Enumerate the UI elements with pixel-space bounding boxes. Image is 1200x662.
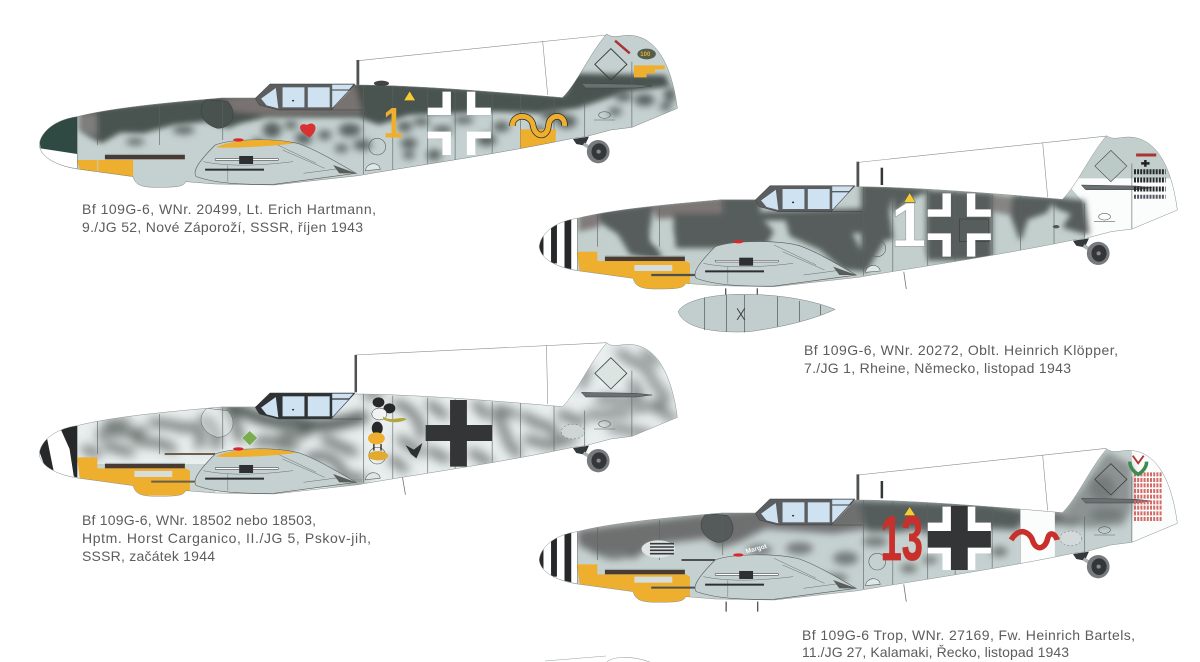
aircraft profile 3: Carganico Bf 109G-6 with Mickey Mouse <box>38 343 677 496</box>
white fuselage band <box>1020 508 1055 566</box>
spinner stripes <box>38 424 77 478</box>
chevron yellow bar <box>520 129 556 151</box>
balkenkreuz white outline <box>428 92 491 155</box>
caption 3: SSSR, začátek 1944 <box>82 548 215 564</box>
tactical number 13: 13 <box>881 504 923 575</box>
fuselage with camouflage <box>544 449 1138 602</box>
drop tank <box>678 288 835 332</box>
outline <box>39 343 677 496</box>
fin diamond <box>1095 464 1127 495</box>
outline <box>39 34 677 187</box>
caption 1: 9./JG 52, Nové Záporoží, SSSR, říjen 1943 <box>82 219 363 235</box>
antenna wire and mast <box>858 136 1107 289</box>
oil cooler vent <box>642 540 675 558</box>
outline <box>539 136 1177 289</box>
caption 4: Bf 109G-6 Trop, WNr. 27169, Fw. Heinrich Bartels, <box>802 627 1135 643</box>
yellow triangle <box>904 507 916 516</box>
spinner stripes <box>539 532 577 583</box>
tactical number 1: 1 <box>891 191 926 261</box>
fuselage with camouflage <box>39 34 677 187</box>
wing yellow panel <box>216 449 296 457</box>
aircraft profile 2: Klöpper Bf 109G-6 with drop tank <box>539 136 1187 332</box>
dome <box>374 81 389 86</box>
yellow lower cowling <box>77 160 133 177</box>
fuselage with camouflage <box>539 136 1187 290</box>
fin diamond filled <box>1095 150 1127 182</box>
caption 2: Bf 109G-6, WNr. 20272, Oblt. Heinrich Klöpper, <box>804 342 1118 358</box>
fin diamond <box>595 358 627 389</box>
balkenkreuz black with white outline <box>928 506 991 570</box>
yellow triangle <box>904 193 916 202</box>
cowling bulge <box>201 99 233 128</box>
cowling bulge white <box>201 408 233 437</box>
fin diamond <box>595 49 627 80</box>
antenna wire and mast <box>355 343 607 495</box>
heart emblem <box>300 123 315 137</box>
cropped next aircraft fragment at bottom edge <box>545 656 650 662</box>
wing yellow panel <box>216 140 294 148</box>
emblem green clover <box>242 431 258 446</box>
outline <box>539 449 1177 602</box>
tactical number 1: 1 <box>384 100 403 147</box>
caption 1: Bf 109G-6, WNr. 20499, Lt. Erich Hartmann, <box>82 201 376 217</box>
aircraft profile 1: Hartmann Bf 109G-6 <box>36 34 677 187</box>
fin markings <box>615 41 665 75</box>
kill markings <box>1134 155 1166 197</box>
Mickey Mouse nose art <box>368 397 407 460</box>
caption 4: 11./JG 27, Kalamaki, Řecko, listopad 1943 <box>802 644 1069 660</box>
rudder wreath emblem <box>1130 456 1147 474</box>
yellow chin <box>77 457 190 496</box>
caption 3: Bf 109G-6, WNr. 18502 nebo 18503, <box>82 512 316 528</box>
spinner stripes <box>539 218 577 270</box>
name on cowling: Margot <box>745 543 769 555</box>
black cross insignia <box>426 400 492 467</box>
yellow triangle <box>404 91 416 101</box>
cowling bulge <box>701 513 733 542</box>
yellow chin <box>577 564 690 602</box>
caption 3: Hptm. Horst Carganico, II./JG 5, Pskov-jih, <box>82 530 371 546</box>
caption 2: 7./JG 1, Rheine, Německo, listopad 1943 <box>804 360 1071 376</box>
antenna wire and mast <box>358 35 607 95</box>
rudder kill bars <box>1134 474 1163 519</box>
spinner: dark green over white <box>40 116 77 168</box>
antenna wire and mast <box>858 448 1107 602</box>
yellow chin <box>577 252 690 290</box>
group wave symbol <box>512 116 565 135</box>
fuselage with white-washed mottle <box>39 343 677 496</box>
aircraft profile 4: Bartels Bf 109G-6 Trop <box>539 445 1187 612</box>
fin markings: 100 <box>640 52 651 58</box>
red wave symbol <box>1011 532 1057 548</box>
bomb rack struts below <box>726 602 758 612</box>
balkenkreuz white outline <box>928 193 991 257</box>
black eagle emblem <box>405 443 422 458</box>
